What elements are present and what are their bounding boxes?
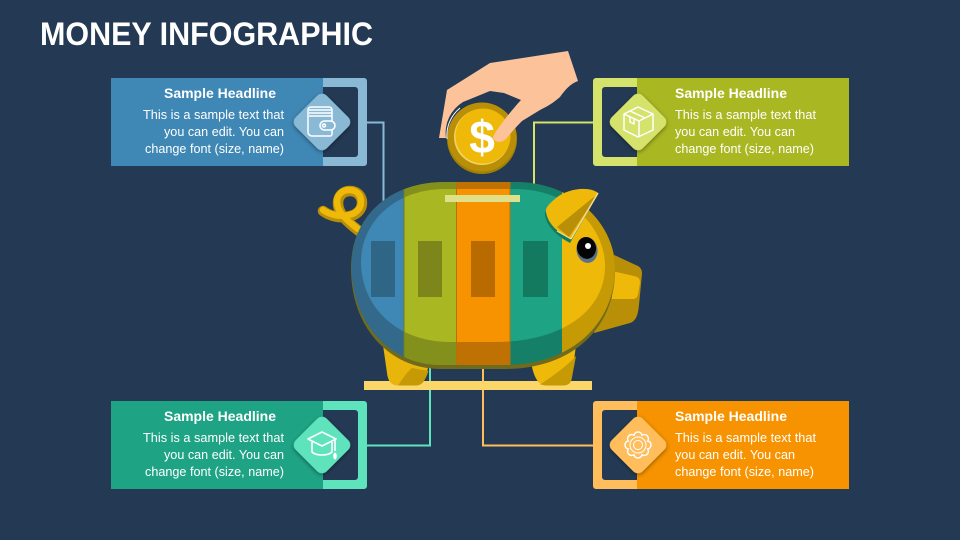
connector: blue xyxy=(367,122,384,208)
text block: This is a sample text that xyxy=(143,108,285,122)
icon: wallet xyxy=(291,91,353,153)
body windows xyxy=(371,241,548,297)
connector: orange xyxy=(483,360,593,446)
piggy bank xyxy=(323,51,642,390)
panel: top left blue xyxy=(111,78,367,166)
icon: box xyxy=(607,91,669,153)
dollar sign: $ xyxy=(469,111,495,163)
text block xyxy=(143,431,285,479)
pig eye xyxy=(574,235,600,265)
pig ear xyxy=(545,189,598,243)
text block xyxy=(675,431,817,479)
panel: bottom right orange xyxy=(593,401,849,489)
text block: This is a sample text that xyxy=(143,431,285,445)
text block: change font (size, name) xyxy=(145,465,284,479)
text block: you can edit. You can xyxy=(164,448,284,462)
coin slot xyxy=(445,195,520,202)
heading: Sample Headline xyxy=(164,409,277,424)
heading: Sample Headline xyxy=(675,86,788,101)
pig tail xyxy=(323,190,362,231)
text block: This is a sample text that xyxy=(675,431,817,445)
text block: This is a sample text that xyxy=(675,108,817,122)
heading: Sample Headline xyxy=(675,409,788,424)
text block: you can edit. You can xyxy=(164,125,284,139)
heading: Sample Headline xyxy=(164,86,277,101)
icon: gear xyxy=(607,414,669,476)
connector: teal xyxy=(367,360,430,446)
panel: bottom left teal xyxy=(111,401,367,489)
coin xyxy=(447,102,517,174)
pig feet xyxy=(383,345,576,386)
text block: change font (size, name) xyxy=(145,142,284,156)
text block: you can edit. You can xyxy=(675,125,795,139)
text block: you can edit. You can xyxy=(675,448,795,462)
icon: hand xyxy=(439,51,578,142)
title: MONEY INFOGRAPHIC xyxy=(40,16,373,52)
text block xyxy=(143,108,285,156)
pig body xyxy=(351,182,615,369)
pig snout xyxy=(594,254,642,333)
base bar xyxy=(364,381,592,390)
text block: change font (size, name) xyxy=(675,465,814,479)
connector: green xyxy=(534,122,593,186)
icon: graduation cap xyxy=(291,414,353,476)
panel: top right green xyxy=(593,78,849,166)
text block: change font (size, name) xyxy=(675,142,814,156)
text block xyxy=(675,108,817,156)
